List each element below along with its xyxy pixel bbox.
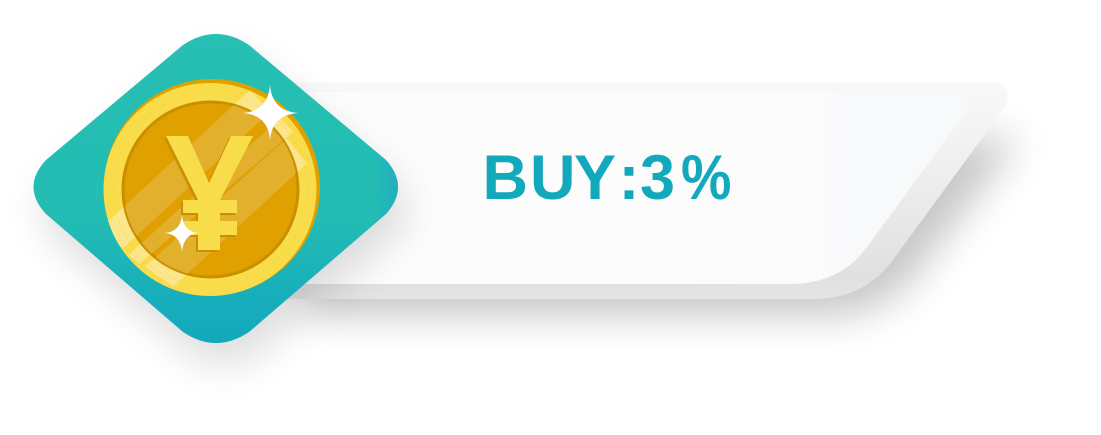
heading: BUY:3%: BUY:3 xyxy=(482,143,675,213)
icon: large sparkle xyxy=(243,85,298,140)
diamond background xyxy=(34,34,398,343)
panel: label plate xyxy=(260,82,1008,299)
infographic: BUY 3% badge xyxy=(34,34,1022,374)
icon: small sparkle xyxy=(165,215,198,252)
coin face highlights xyxy=(125,106,296,274)
coin xyxy=(97,79,320,296)
yen symbol shadow xyxy=(164,138,251,252)
coin face xyxy=(123,102,298,277)
coin rim highlights xyxy=(97,90,307,287)
panel shadow xyxy=(310,138,1020,316)
heading: BUY:3%: % xyxy=(681,142,731,213)
yen symbol xyxy=(166,136,253,250)
diamond shadow xyxy=(42,56,406,365)
icon: teal diamond with yen coin xyxy=(34,34,398,343)
panel inner face xyxy=(260,92,969,284)
panel outer bevel xyxy=(260,82,1008,299)
